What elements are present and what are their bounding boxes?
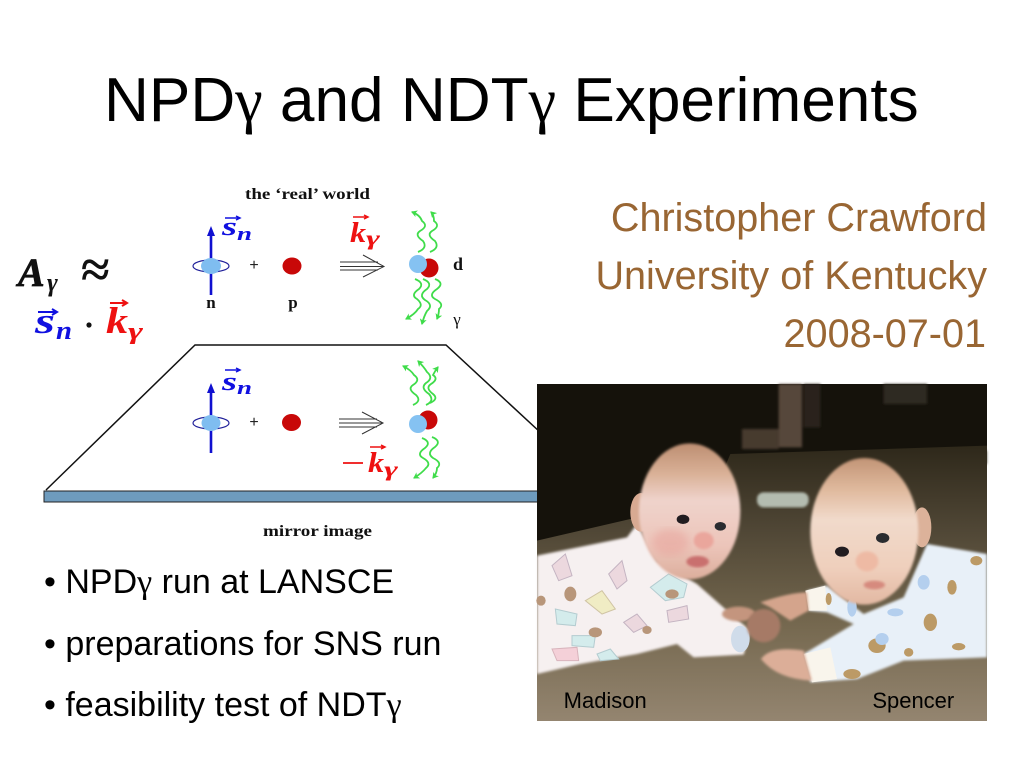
baby right: Spencer bbox=[760, 458, 987, 682]
gamma waves down, mirrored bbox=[414, 437, 439, 478]
author block: 2008-07-01 bbox=[784, 312, 986, 356]
carpet bbox=[537, 446, 987, 721]
formula: asymmetry: ≈ bbox=[81, 242, 110, 299]
diagram: mirror image bbox=[44, 345, 541, 540]
diagram: the real world: + bbox=[249, 257, 259, 274]
formula: asymmetry: s bbox=[34, 301, 55, 341]
bullet: LANSCE: • NPDγ run at LANSCE bbox=[44, 563, 394, 601]
k gamma label: k bbox=[350, 218, 366, 249]
label: Spencer: Spencer bbox=[872, 688, 954, 713]
author block bbox=[595, 196, 987, 356]
gamma waves down bbox=[406, 279, 441, 324]
formula: asymmetry bbox=[15, 242, 143, 345]
diagram: the real world bbox=[193, 186, 463, 329]
bullet: SNS: • preparations for SNS run bbox=[44, 625, 441, 663]
reaction arrow, mirrored bbox=[339, 412, 383, 434]
neutron with spin bbox=[193, 212, 252, 312]
baby left: Madison bbox=[536, 443, 780, 674]
mirror plate bbox=[44, 491, 540, 502]
formula: asymmetry: A bbox=[15, 250, 45, 295]
deuteron bbox=[409, 255, 438, 278]
diagram: the real world: d bbox=[453, 254, 463, 274]
neutron with spin: s bbox=[221, 212, 237, 241]
neutron with spin, mirrored: n bbox=[237, 378, 252, 399]
minus k gamma label bbox=[343, 445, 399, 481]
title: NPDγ and NDTγ Experiments bbox=[104, 66, 919, 135]
formula: asymmetry: γ bbox=[128, 319, 143, 345]
minus k gamma label: γ bbox=[384, 459, 399, 481]
deuteron, mirrored bbox=[409, 410, 438, 433]
heading: the real world: the ‘real’ world bbox=[245, 186, 370, 203]
formula: asymmetry: γ bbox=[47, 268, 58, 297]
diagram: the real world: γ bbox=[366, 228, 381, 250]
minus k gamma label: k bbox=[368, 448, 384, 479]
bullet list bbox=[44, 563, 441, 724]
neutron with spin: n bbox=[237, 224, 252, 245]
reaction arrow bbox=[340, 255, 384, 277]
background room bbox=[742, 384, 987, 464]
proton: p bbox=[288, 293, 298, 312]
diagram: the real world: γ bbox=[452, 310, 461, 329]
label: Madison: Madison bbox=[564, 688, 647, 713]
proton bbox=[282, 258, 302, 312]
bullet: NDT: • feasibility test of NDTγ bbox=[44, 686, 402, 724]
mirror outline bbox=[46, 345, 541, 490]
author block: University of Kentucky bbox=[595, 254, 987, 298]
gamma waves up bbox=[412, 212, 437, 252]
neutron with spin, mirrored: s bbox=[221, 367, 237, 396]
gamma waves up, mirrored bbox=[403, 361, 438, 405]
proton, mirrored bbox=[282, 414, 301, 431]
formula: asymmetry: n bbox=[56, 316, 72, 345]
neutron with spin: n bbox=[206, 293, 216, 312]
diagram: mirror image: + bbox=[249, 414, 259, 431]
caption: mirror image: mirror image bbox=[263, 523, 372, 540]
neutron with spin, mirrored bbox=[193, 367, 252, 453]
author block: Christopher Crawford bbox=[611, 196, 987, 240]
formula: asymmetry: k bbox=[106, 301, 129, 342]
photo: Madison and Spencer bbox=[536, 384, 987, 721]
